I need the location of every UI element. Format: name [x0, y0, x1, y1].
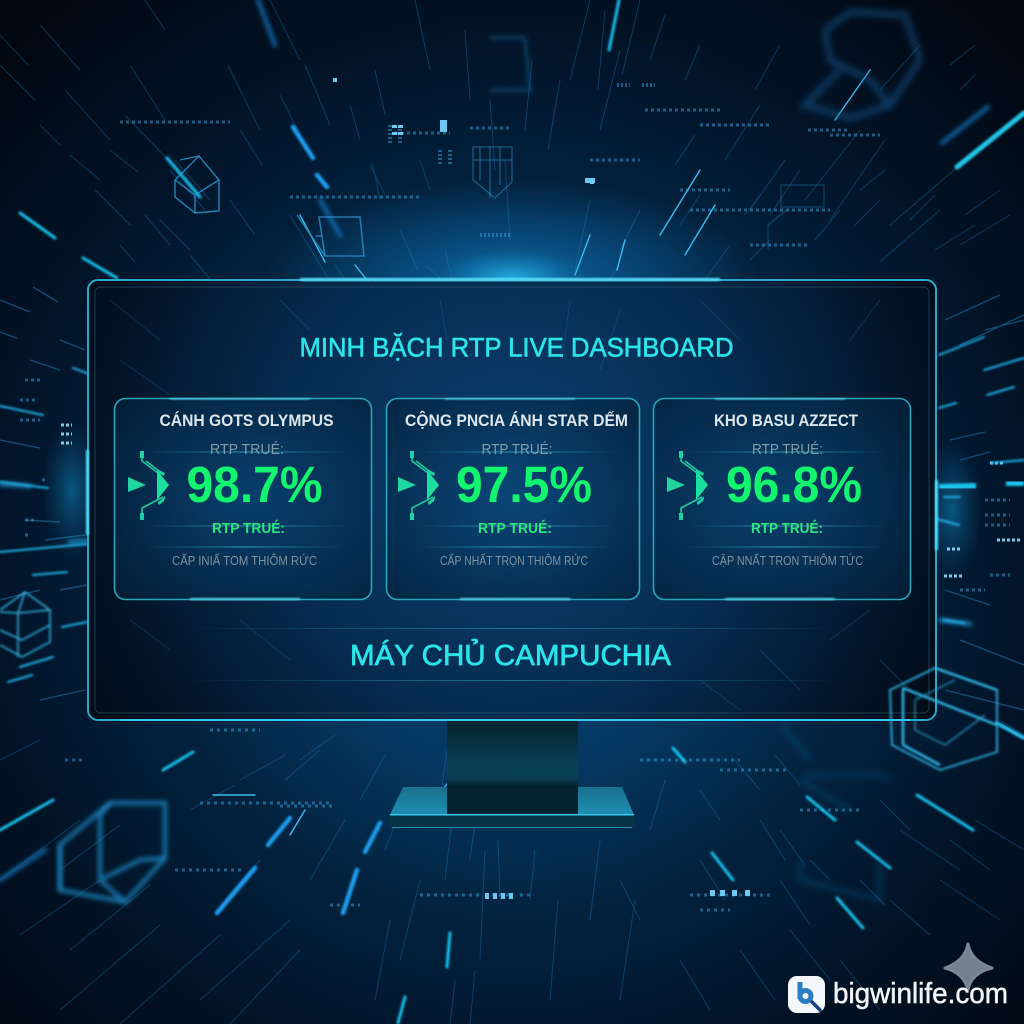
status text: CẤP NHẤT TRỌN THIÔM RỨC: [440, 553, 588, 568]
icon: arrow circuit: [398, 451, 439, 520]
panel: card 3: [654, 398, 910, 600]
icon: faint cube lower right: [785, 670, 890, 900]
label: RTP TRUÉ:: [210, 441, 284, 458]
data glyph dashes: [20, 85, 1020, 910]
value: 96.8%: [726, 456, 862, 513]
side streaks: [0, 337, 1024, 682]
icon: faint cube top: [490, 38, 530, 90]
monitor stand: [390, 721, 634, 828]
icon: faint square upper right: [768, 185, 824, 250]
neck shadow: [447, 788, 578, 814]
icon: wireframe panel top centre: [297, 215, 364, 256]
icon: arrow circuit: [128, 451, 169, 520]
value: 98.7%: [186, 456, 322, 513]
card heading: CÁNH GOTS OLYMPUS: [160, 411, 334, 430]
divider lines: [148, 452, 350, 453]
divider lines: [418, 452, 618, 453]
title: MINH BẶCH RTP LIVE DASHBOARD: [300, 332, 734, 362]
icon: blurred cube bottom left: [60, 803, 165, 902]
label green: RTP TRUÉ:: [751, 520, 823, 537]
server label: MÁY CHỦ CAMPUCHIA: [350, 638, 672, 672]
icon: arrow circuit: [667, 451, 708, 520]
panel: card 2: [386, 398, 640, 600]
logo badge: [788, 976, 825, 1013]
status text: CẤP INIẤ TOM THIÔM RỨC: [172, 553, 317, 568]
divider lines: [687, 452, 887, 453]
status text: CẬP NNẤT TRON THIÔM TỨC: [712, 553, 863, 568]
icon: wireframe cube top left: [175, 156, 219, 213]
card heading: KHO BASU AZZECT: [714, 411, 859, 430]
stand neck: [447, 721, 578, 789]
monitor screen frame: [86, 278, 938, 721]
small dots cluster: [333, 78, 750, 899]
screen scatter lines: [110, 300, 920, 710]
card heading: CỘNG PNCIA ÁNH STAR DẾM: [405, 411, 628, 430]
icon: wireframe cube upper centre: [473, 147, 512, 198]
server label lines: [180, 628, 850, 681]
label green: RTP TRUÉ:: [212, 520, 285, 537]
value: 97.5%: [456, 456, 592, 513]
icon: foreground cube right: [890, 668, 1024, 770]
logo text: bigwinlife.com: [833, 978, 1008, 1010]
icon: blurred shape top right: [805, 12, 920, 118]
icon: sparkle star: [945, 944, 992, 990]
label: RTP TRUÉ:: [482, 441, 552, 458]
icon: wireframe cube left: [0, 592, 50, 657]
label: RTP TRUÉ:: [752, 441, 823, 458]
stand base: [390, 787, 634, 828]
panel: card 1: [114, 398, 372, 600]
label green: RTP TRUÉ:: [478, 520, 552, 537]
